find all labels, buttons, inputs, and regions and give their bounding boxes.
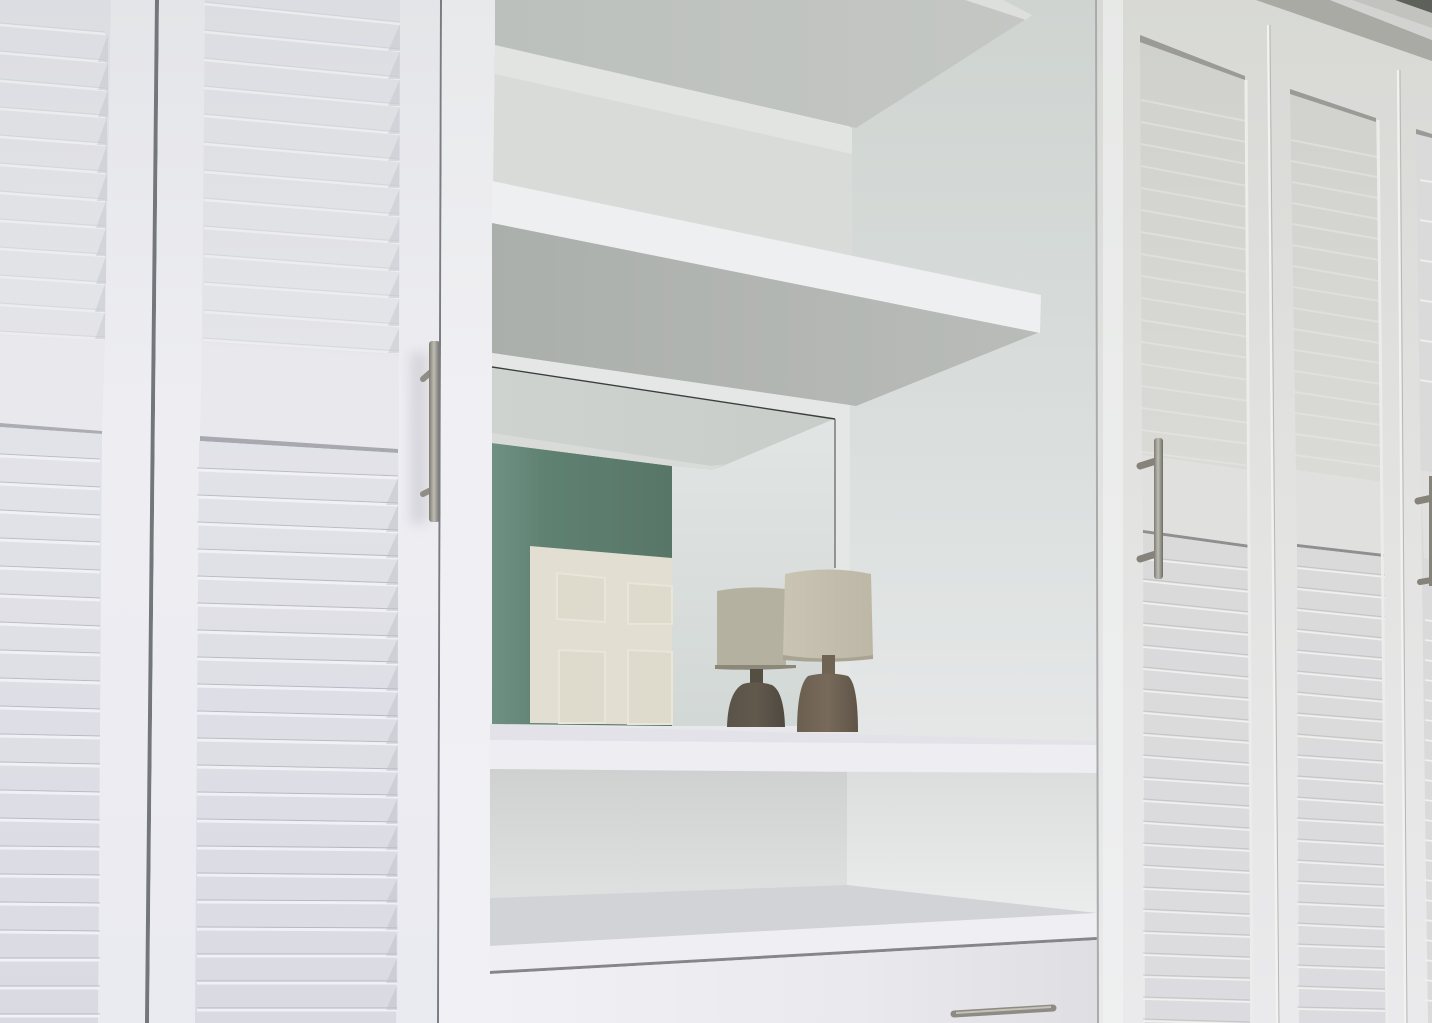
door A rail groove: [0, 423, 102, 434]
top shelf underside: [495, 0, 1029, 128]
drawer: [490, 937, 1097, 1023]
door 1 lower louvers: [1143, 533, 1250, 1023]
lamp: right lamp: [783, 570, 873, 732]
door B: [149, 0, 441, 1023]
door 1 top groove: [1140, 35, 1245, 80]
trim gap: [1096, 0, 1098, 1023]
lamp shelf: [490, 724, 1097, 773]
upper back wall: [493, 45, 852, 262]
door 3 rail: [1420, 470, 1432, 560]
door B right stile: [397, 0, 441, 1023]
cubby shelf top: [490, 885, 1097, 946]
right door 3 handle: [1418, 476, 1432, 586]
crown molding: [1256, 0, 1432, 61]
door A upper wedges: [95, 34, 108, 339]
top shelf front edge: [965, 0, 1032, 20]
door B upper louvers: [202, 0, 401, 355]
cubby right wall: [847, 772, 1097, 914]
door 3 top groove: [1416, 129, 1432, 138]
door 2 rail: [1296, 470, 1384, 555]
drawer face: [490, 940, 1097, 1023]
second shelf front: [492, 181, 1041, 333]
gap door B to center frame: [437, 0, 442, 1023]
mirror green wall: [492, 443, 672, 726]
drawer handle: [954, 1007, 1053, 1014]
right door 1 handle: [1140, 438, 1163, 579]
mirror top edge line: [492, 367, 835, 419]
door A middle rail: [0, 335, 105, 432]
mirror right edge line: [834, 419, 836, 568]
door 2 upper louvers: [1290, 92, 1383, 482]
door A stile: [94, 0, 157, 1023]
handle shadow: [410, 352, 428, 524]
upper louver end wedges: [388, 24, 400, 353]
door B handle: [423, 341, 440, 522]
side trim highlight: [1103, 0, 1123, 1023]
door A lower louvers: [0, 427, 102, 1023]
right cabinet doors: [1095, 0, 1432, 1023]
mirror shelf lip: [492, 433, 725, 470]
door B rail groove: [200, 436, 398, 453]
crown molding: [495, 45, 852, 154]
door A upper louvers: [0, 0, 111, 340]
door B middle rail: [200, 345, 399, 450]
door 1 upper louvers: [1140, 38, 1250, 470]
center column frame: [439, 0, 495, 1023]
second shelf underside: [492, 222, 1040, 406]
center shelving unit: [492, 0, 1097, 760]
gap between door A and door B: [145, 0, 159, 1023]
door 3 louvers: [1416, 132, 1432, 1023]
right cabinet base: [1095, 0, 1432, 1023]
lower louver end wedges: [386, 478, 398, 1010]
reflected door: [530, 546, 672, 725]
door 2 lower louvers: [1297, 547, 1387, 1023]
shelf top: [490, 724, 1097, 745]
right wall of niche: [850, 0, 1097, 760]
mirror: [492, 367, 835, 726]
door 2 top groove: [1290, 89, 1376, 122]
lower cubby: [490, 769, 1097, 971]
door 1 rail groove: [1143, 530, 1250, 548]
mirror wall reflection: [672, 418, 835, 726]
lamp: reflected left lamp: [715, 587, 796, 727]
cubby shelf front: [490, 913, 1097, 971]
cubby back wall: [490, 769, 847, 898]
door 2 rail groove: [1297, 544, 1384, 557]
drawer gap: [490, 937, 1097, 974]
door B left stile: [149, 0, 205, 1023]
mirror shelf underside: [492, 368, 834, 470]
door B lower louvers: [195, 441, 398, 1023]
stile grooves: [1246, 25, 1407, 1023]
shelf front: [490, 740, 1097, 773]
mirror frame: [492, 353, 856, 726]
left door A: [0, 0, 157, 1023]
door 1 rail: [1142, 455, 1250, 546]
